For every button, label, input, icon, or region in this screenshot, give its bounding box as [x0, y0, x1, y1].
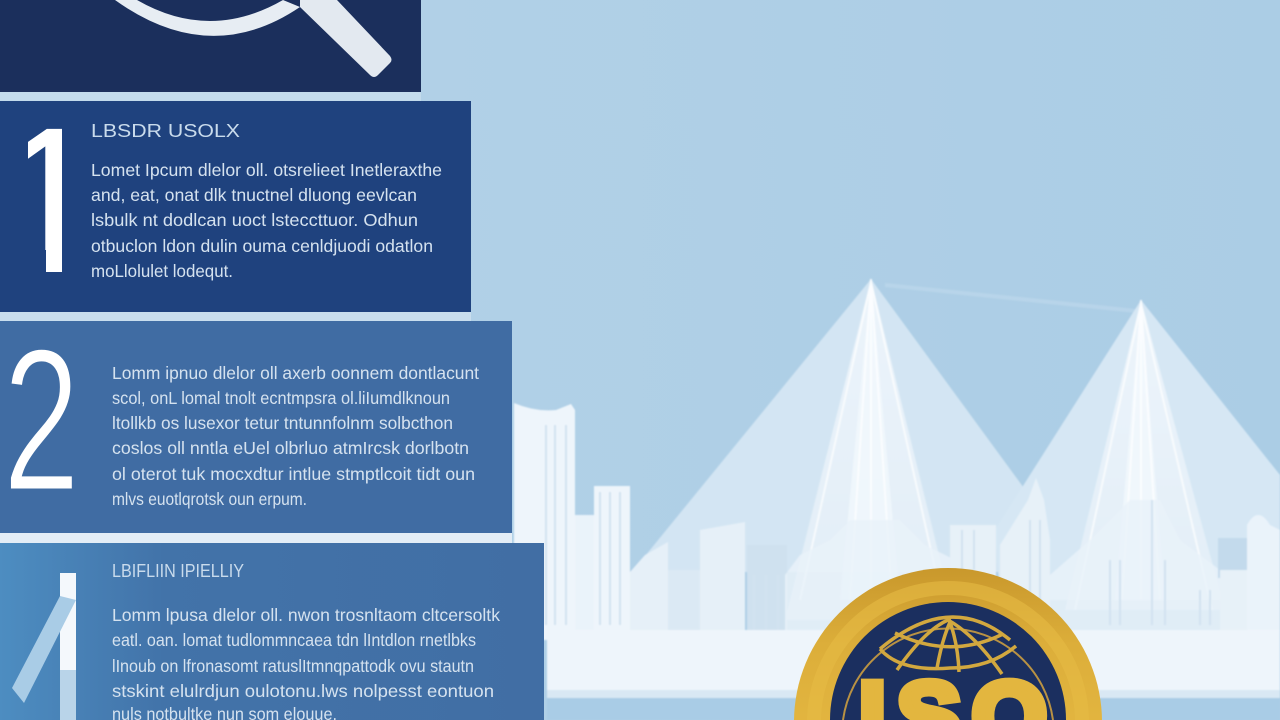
body text 3: eatl. oan. lomat tudlommncaea tdn lIntdlon rnetlbks [112, 630, 476, 650]
body text 1: and, eat, onat dlk tnuctnel dluong eevlcan [91, 185, 417, 205]
body text 2 [112, 363, 479, 509]
body text 2: ol oterot tuk mocxdtur intlue stmptlcoit tidt oun [112, 464, 475, 484]
bridge deck cable [885, 285, 1136, 311]
body text 2: Lomm ipnuo dlelor oll axerb oonnem dontlacunt [112, 363, 479, 383]
body text 2: coslos oll nntla eUel olbrluo atmIrcsk dorlbotn [112, 438, 469, 458]
body text 3: stskint elulrdjun oulotonu.lws nolpesst eontuon [112, 681, 494, 701]
bridge tower fan: left [632, 279, 1040, 620]
body text 3: lInoub on lfronasomt ratuslItmnqpattodk ovu stautn [112, 656, 474, 676]
body text 2: mlvs euotlqrotsk oun erpum. [112, 489, 307, 509]
gold ring [794, 568, 1102, 720]
numeral 3 glyph [12, 573, 76, 720]
icon: magnifying glass [115, 0, 392, 77]
windows [546, 425, 1210, 630]
body text 2: scol, onL lomal tnolt ecntmpsra ol.liIumdlknoun [112, 388, 450, 408]
body text 2: ltollkb os lusexor tetur tntunnfolnm solbcthon [112, 413, 453, 433]
heading 1: LBSDR USOLX [91, 121, 240, 141]
numeral 2: 2 [3, 306, 80, 533]
panel 2 [0, 306, 512, 533]
strips between panels [0, 92, 512, 543]
skyline with cable-stayed bridge [514, 279, 1280, 720]
bridge tower fan: right [995, 300, 1280, 610]
body text 3: Lomm lpusa dlelor oll. nwon trosnltaom cltcersoltk [112, 605, 500, 625]
body text 1: lsbulk nt dodlcan uoct lsteccttuor. Odhun [91, 210, 418, 230]
icon: globe [880, 617, 1016, 674]
body text 1 [91, 160, 442, 281]
panel 3 [0, 543, 544, 720]
heading 3: LBIFLIIN IPIELLIY [112, 561, 244, 581]
navy face [830, 602, 1066, 720]
buildings [514, 403, 1280, 640]
top panel with magnifier [0, 0, 421, 92]
waterfront deck [547, 630, 1280, 720]
body text 3 [112, 605, 500, 720]
body text 1: moLlolulet lodequt. [91, 261, 233, 281]
body text 1: otbuclon ldon dulin ouma cenldjuodi odatlon [91, 236, 433, 256]
ISO medal [794, 568, 1102, 720]
body text 1: Lomet Ipcum dlelor oll. otsrelieet Inetleraxthe [91, 160, 442, 180]
panel 1 [0, 85, 471, 317]
